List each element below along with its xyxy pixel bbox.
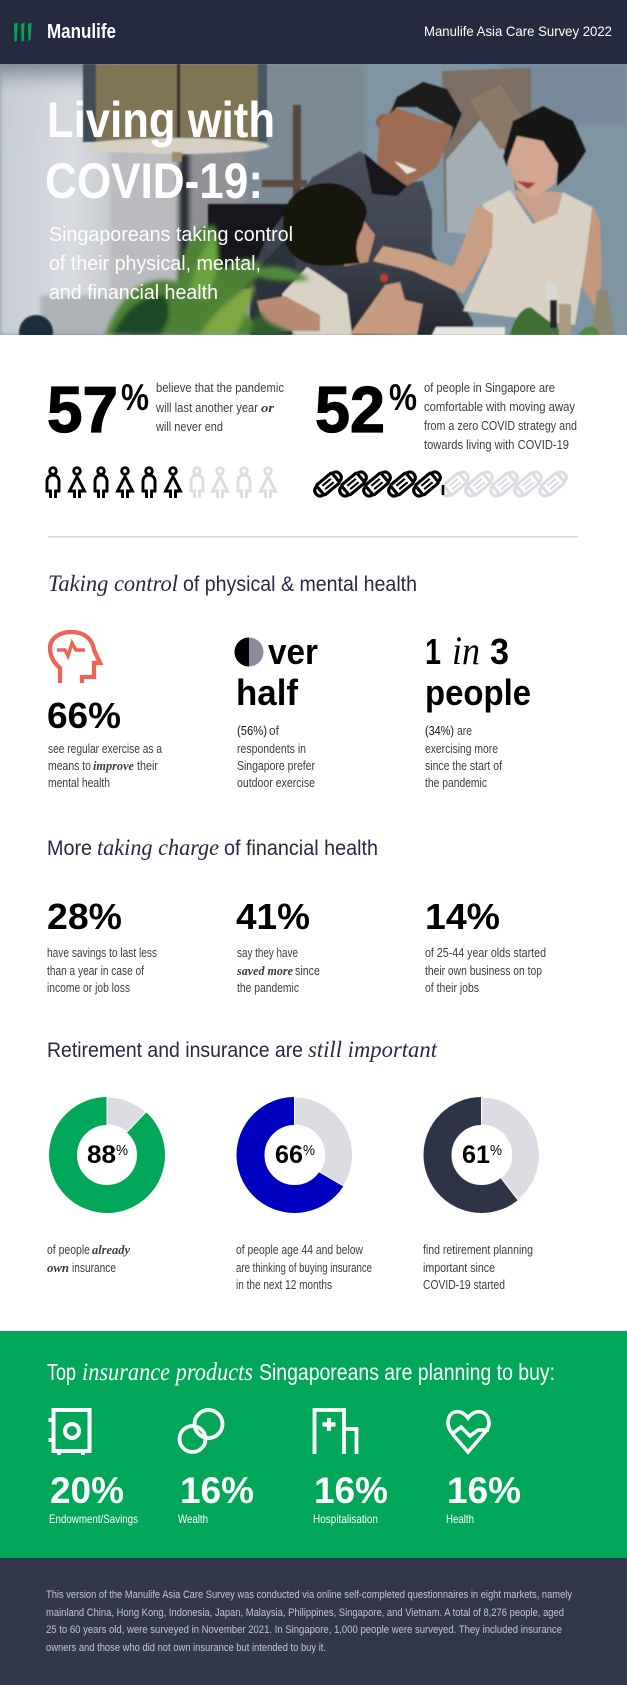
donut: 88%: 88 (87, 1141, 116, 1169)
stat: 28% savings: income or job loss (47, 980, 130, 995)
stat: 57% pandemic belief: % (121, 377, 149, 418)
icon: head with pulse (50, 632, 100, 683)
icon: Manulife logo stripes (14, 22, 32, 42)
hero title: COVID-19: (45, 153, 263, 209)
stat: over half: (56%) (237, 723, 267, 738)
girl (257, 183, 423, 335)
product: wealth: 16% (180, 1470, 254, 1511)
footer methodology note: 25 to 60 years old, were surveyed in November 2021. In Singapore, 1,000 people were surveyed. They included insurance (46, 1624, 562, 1636)
stat: 57% pandemic belief: will last another year (155, 400, 259, 415)
stat: 14% own business: their own business on top (425, 963, 542, 978)
product: health (446, 1412, 521, 1526)
stat: 1 in 3 people: exercising more (425, 741, 498, 756)
stat: 41% saved more: since (295, 963, 320, 978)
product: hospitalisation: Hospitalisation (313, 1512, 378, 1526)
icon: half moon O (234, 638, 264, 666)
donut: 61%: 61 (462, 1141, 490, 1169)
donut: 66%: in the next 12 months (236, 1277, 332, 1292)
donut: 61%: find retirement planning (423, 1242, 533, 1257)
icon: safe (48, 1410, 90, 1455)
stat: 66% exercise: see regular exercise as a (48, 741, 163, 756)
stat: 28% savings: than a year in case of (47, 963, 144, 978)
donut: 88%: of people (47, 1242, 90, 1257)
heading: taking control: of physical & mental health (183, 572, 417, 596)
stat: over half: outdoor exercise (237, 775, 315, 790)
stat: 14% own business: 14% (425, 896, 500, 937)
stat: 14% own business: of 25-44 year olds started (425, 945, 546, 960)
footer methodology note (0, 1558, 627, 1685)
stat: over half: respondents in (237, 741, 306, 756)
hero subtitle (49, 223, 293, 304)
stat: 57% pandemic belief: or (261, 400, 275, 415)
product: health: Health (446, 1512, 474, 1526)
green panel heading: Top (47, 1359, 76, 1385)
stat: 57% pandemic belief: believe that the pandemic (156, 380, 284, 395)
product: endowment/savings (48, 1410, 138, 1526)
chair and screen (208, 204, 293, 289)
stat: 41% saved more: saved more (236, 963, 293, 978)
stat: 41% saved more: 41% (236, 896, 310, 937)
stat: 66% exercise: their (137, 758, 159, 773)
stat: 66% exercise (47, 632, 163, 790)
product: hospitalisation: 16% (314, 1470, 388, 1511)
stat: 1 in 3 people: are (457, 723, 472, 738)
foreground plants (105, 225, 310, 335)
donut: 66%: are thinking of buying insurance (236, 1260, 372, 1275)
donut: 61%: COVID-19 started (423, 1277, 505, 1292)
hero subtitle: Singaporeans taking control (49, 223, 293, 246)
stat: 14% own business: of their jobs (425, 980, 479, 995)
lamp (83, 64, 267, 142)
donut: 61%: important since (423, 1260, 495, 1275)
stat: 1 in 3 people: in (452, 628, 480, 673)
stat: 1 in 3 people (425, 628, 531, 790)
donut: 66%: of people age 44 and below (236, 1242, 363, 1257)
stat: 52% comfortable moving away: towards living with COVID-19 (424, 437, 569, 452)
logo wordmark: Manulife (47, 21, 116, 43)
stat: 66% exercise: means to (48, 758, 91, 773)
icon: hospital (314, 1410, 356, 1454)
stat: over half: of (269, 723, 279, 738)
stat: over half (234, 631, 318, 790)
stat: over half: Singapore prefer (237, 758, 316, 773)
stat: 52% comfortable moving away: from a zero COVID strategy and (424, 418, 577, 433)
donut: 61% (423, 1097, 539, 1292)
product: hospitalisation (313, 1410, 388, 1526)
icon: linked rings (180, 1410, 222, 1452)
stat: 57% pandemic belief: will never end (155, 419, 223, 434)
donut: 88% (47, 1097, 151, 1275)
heading: taking control: Taking control (48, 571, 178, 596)
picture on wall (442, 68, 531, 232)
hero title: Living with (47, 92, 275, 148)
heading: taking charge: of financial health (224, 836, 378, 860)
heading: retirement and insurance: still important (308, 1037, 438, 1062)
stat: 28% savings (47, 896, 157, 995)
donut: 61%: % (490, 1142, 502, 1159)
heading: retirement and insurance: Retirement and insurance are (47, 1038, 303, 1062)
heading: taking charge: More (47, 836, 92, 860)
icon: heart with pulse (448, 1412, 489, 1452)
product: health: 16% (447, 1470, 521, 1511)
stat: 41% saved more (236, 896, 320, 995)
woman (373, 106, 602, 325)
stat: 28% savings: have savings to last less (47, 945, 157, 960)
green panel heading: Singaporeans are planning to buy: (259, 1359, 555, 1385)
table items (432, 283, 615, 335)
stat: 41% saved more: say they have (237, 945, 298, 960)
donut: 88%: own (47, 1260, 69, 1275)
stat: over half: half (236, 672, 299, 713)
stat: 57% pandemic belief (47, 373, 284, 446)
heading: retirement and insurance (47, 1037, 438, 1062)
header bar (0, 0, 627, 64)
hero subtitle: of their physical, mental, (49, 252, 261, 275)
stat: 41% saved more: the pandemic (237, 980, 299, 995)
heading: taking charge (47, 835, 378, 860)
stat: 52% comfortable moving away: % (389, 377, 417, 418)
bottom-left furniture (19, 315, 53, 349)
hero photo: family in kitchen (0, 64, 627, 349)
heading: taking control (48, 571, 417, 596)
donut: 66% (236, 1097, 372, 1292)
stat: 1 in 3 people: (34%) (425, 723, 454, 738)
stat: 52% comfortable moving away (315, 373, 577, 452)
man (250, 82, 473, 335)
hero subtitle: and financial health (49, 281, 218, 304)
stat: 14% own business (425, 896, 546, 995)
stat: 66% exercise: improve (93, 758, 134, 773)
stat: 52% comfortable moving away: of people in Singapore are (424, 380, 555, 395)
donut: 66%: % (303, 1142, 315, 1159)
stat: 1 in 3 people: since the start of (425, 758, 502, 773)
green panel heading (47, 1359, 555, 1386)
stat: over half: ver (268, 631, 318, 672)
stat: 52% comfortable moving away: 52 (315, 373, 385, 446)
product: endowment/savings: 20% (50, 1470, 124, 1511)
stat: 1 in 3 people: 3 (490, 631, 509, 672)
donut: 88%: % (116, 1142, 128, 1159)
footer methodology note: owners and those who did not own insurance but intended to buy it. (46, 1642, 326, 1654)
stat: 1 in 3 people: 1 (425, 631, 441, 672)
product: endowment/savings: Endowment/Savings (49, 1512, 138, 1526)
donut: 88%: insurance (72, 1260, 116, 1275)
stat: 57% pandemic belief: 57 (47, 373, 118, 446)
stat: 66% exercise: mental health (48, 775, 110, 790)
icon row: people 57 of 100 (47, 468, 276, 498)
product: wealth: Wealth (178, 1512, 208, 1526)
product: wealth (178, 1410, 254, 1526)
stat: 1 in 3 people: people (425, 672, 531, 713)
stat: 52% comfortable moving away: comfortable with moving away (424, 399, 575, 414)
stat: 66% exercise: 66% (47, 695, 121, 736)
panel: top insurance products (0, 1331, 627, 1558)
donut: 66%: 66 (275, 1141, 303, 1169)
stat: 1 in 3 people: the pandemic (425, 775, 487, 790)
donut: 88%: already (92, 1242, 130, 1257)
heading: taking charge: taking charge (97, 835, 219, 860)
stat: 28% savings: 28% (47, 896, 122, 937)
hero title (45, 92, 275, 209)
survey name: Manulife Asia Care Survey 2022 (424, 23, 612, 39)
icon row: masks 52 of 100 (312, 469, 569, 499)
green panel heading: insurance products (82, 1359, 253, 1386)
